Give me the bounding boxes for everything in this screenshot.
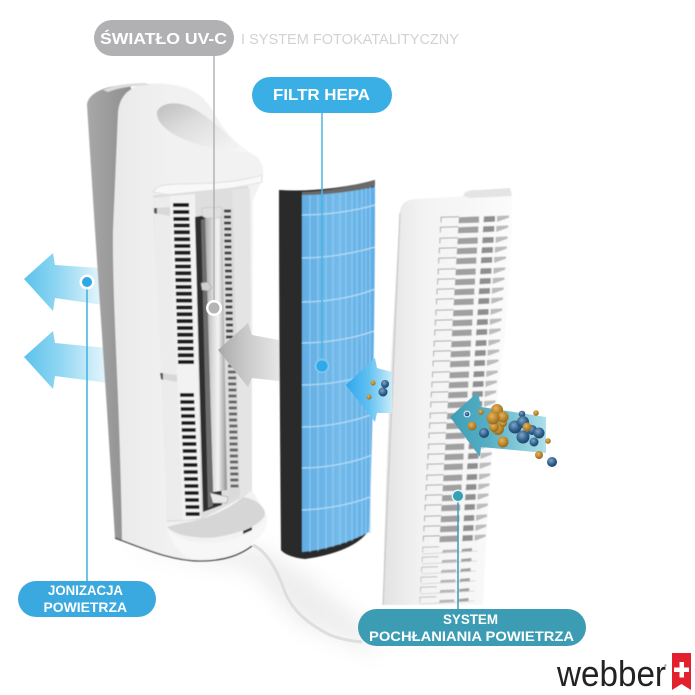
filter blue pleats: [302, 187, 375, 552]
leader line HEPA: [321, 113, 323, 366]
right vent slats lower: [228, 366, 238, 486]
purifier white housing: [113, 83, 267, 561]
left frame strip: [153, 196, 190, 520]
marker intake: [452, 490, 464, 502]
pill UV-C: [94, 20, 234, 56]
UV-C lamp tube: [205, 212, 227, 492]
arrow: blue air flow into filter: [346, 358, 392, 422]
filter black frame: [279, 180, 375, 559]
arrow: grey air flow through filter: [218, 323, 279, 387]
label intake: POCHŁANIANIA POWIETRZA: [369, 628, 574, 644]
base rim: [167, 514, 267, 560]
callout: air intake system: [358, 490, 586, 646]
dark base edge: [115, 538, 252, 561]
arrow: upper ionised air outflow: [24, 253, 103, 311]
grille right tab: [463, 188, 512, 198]
logo wordmark: webber: [556, 653, 666, 694]
marker HEPA: [314, 358, 330, 374]
pill intake: [358, 609, 586, 646]
filter grey top: [302, 180, 375, 196]
outer air-intake grille: [383, 188, 512, 605]
label ionisation: JONIZACJA: [48, 582, 123, 598]
marker UV-C: [206, 300, 222, 316]
purifier grey back shell: [87, 85, 135, 541]
right vent slats upper: [224, 211, 233, 337]
grille body: [383, 190, 512, 605]
label HEPA: FILTR HEPA: [273, 87, 370, 104]
small particles: [366, 380, 389, 400]
callout: HEPA filter: [252, 77, 392, 374]
leader line intake: [457, 496, 459, 609]
callout: ionisation: [18, 274, 156, 617]
power cord: [253, 545, 362, 642]
label intake: SYSTEM: [443, 611, 498, 627]
lamp mid clip: [201, 282, 212, 291]
lamp lower clip: [210, 493, 228, 503]
right slat strip: [223, 208, 240, 500]
subtitle: photocatalytic system: I SYSTEM FOTOKATALITYCZNY: [241, 31, 459, 48]
power socket: [243, 527, 252, 534]
label UV-C: ŚWIATŁO UV-C: [100, 29, 227, 48]
filter horizontal bands: [302, 205, 375, 510]
clip ticks: [154, 207, 177, 382]
grille shaded left edge: [383, 213, 400, 605]
marker ionisation: [80, 274, 94, 290]
top lip of opening: [153, 175, 262, 195]
arrow: lower ionised air outflow: [24, 331, 108, 389]
pill HEPA: [252, 77, 392, 113]
inner grey rail: [201, 218, 213, 508]
leader line UV-C: [213, 56, 215, 308]
leader line ionisation: [86, 282, 88, 581]
lamp top cap: [202, 207, 222, 218]
filter vertical ribs: [310, 187, 370, 552]
logo swiss flag: [672, 653, 691, 690]
logo registered mark: ®: [664, 663, 667, 668]
slat panel: [170, 194, 201, 520]
right side wall: [232, 188, 252, 498]
handle recess: [157, 103, 246, 152]
top button strip: [103, 83, 150, 92]
base platform: [167, 497, 265, 538]
pill ionisation: [18, 581, 156, 617]
central dark channel: [195, 214, 222, 512]
pollution particles: [464, 404, 557, 467]
arrow: teal polluted air intake: [450, 392, 557, 467]
air purifier unit: [87, 83, 267, 561]
clip tick ends: [154, 208, 163, 380]
left vent slats upper: [173, 205, 194, 362]
label ionisation: POWIETRZA: [44, 599, 127, 615]
soft floor shadow: [125, 548, 380, 655]
left vent slats lower: [180, 395, 200, 514]
interior opening panel: [153, 186, 252, 522]
HEPA filter cartridge: [279, 180, 375, 559]
grille slot rows: [420, 215, 509, 604]
logo: webber: [556, 653, 691, 694]
callout: UV-C light: [94, 20, 234, 316]
